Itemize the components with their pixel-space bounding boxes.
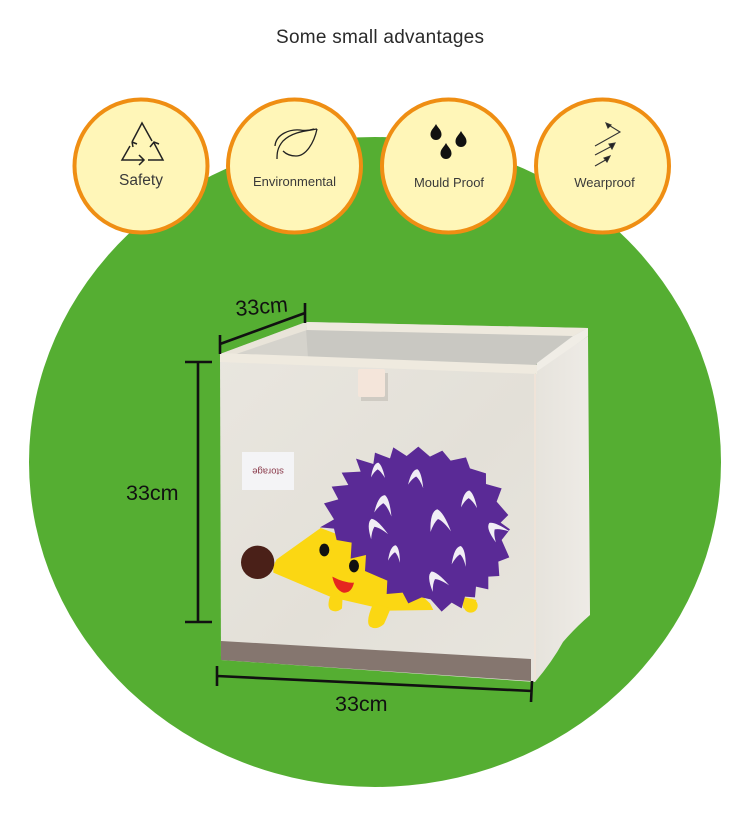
box left inner wall (233, 329, 308, 358)
box front seam (534, 374, 536, 680)
badge: environmental (228, 100, 361, 232)
box left rim (220, 322, 307, 354)
box back rim (306, 322, 588, 336)
label: depth 33cm: 33cm (234, 292, 289, 321)
box handle tab (358, 369, 388, 401)
title: Some small advantages (276, 27, 484, 48)
hedgehog mouth (332, 577, 354, 593)
hedgehog nose (241, 546, 274, 579)
hedgehog legs (328, 597, 343, 611)
hedgehog quills (363, 463, 510, 594)
hedgehog appliqué (241, 447, 510, 628)
label: safety: Safety (119, 172, 163, 189)
label: mould proof: Mould Proof (414, 175, 484, 190)
icon: leaf (275, 129, 317, 159)
box front panel (220, 354, 535, 682)
dimension: width (217, 666, 532, 716)
badge: mould proof (382, 100, 515, 232)
label: environmental: Environmental (253, 174, 336, 189)
storage box (220, 322, 590, 682)
sewn label: storage (252, 465, 284, 476)
hedgehog yellow body (273, 528, 478, 628)
hedgehog eyes (319, 544, 359, 572)
icon: recycling triangle (122, 123, 163, 165)
box interior (220, 322, 588, 366)
green background ellipse (29, 137, 721, 787)
badge: safety (74, 100, 208, 232)
box right rim (537, 328, 588, 373)
icon: wear arrows (595, 123, 620, 166)
dimension: height (126, 362, 212, 622)
label: height 33cm: 33cm (126, 481, 179, 505)
box front rim (220, 353, 537, 374)
box side panel (535, 336, 590, 682)
badge: wearproof (536, 100, 669, 232)
dimension: depth (220, 292, 305, 354)
box grey band (221, 641, 531, 681)
hedgehog purple spikes (320, 447, 510, 612)
label: wearproof: Wearproof (574, 175, 635, 190)
sewn label (242, 452, 294, 490)
label: width 33cm: 33cm (335, 692, 388, 716)
icon: water drops (430, 124, 466, 159)
